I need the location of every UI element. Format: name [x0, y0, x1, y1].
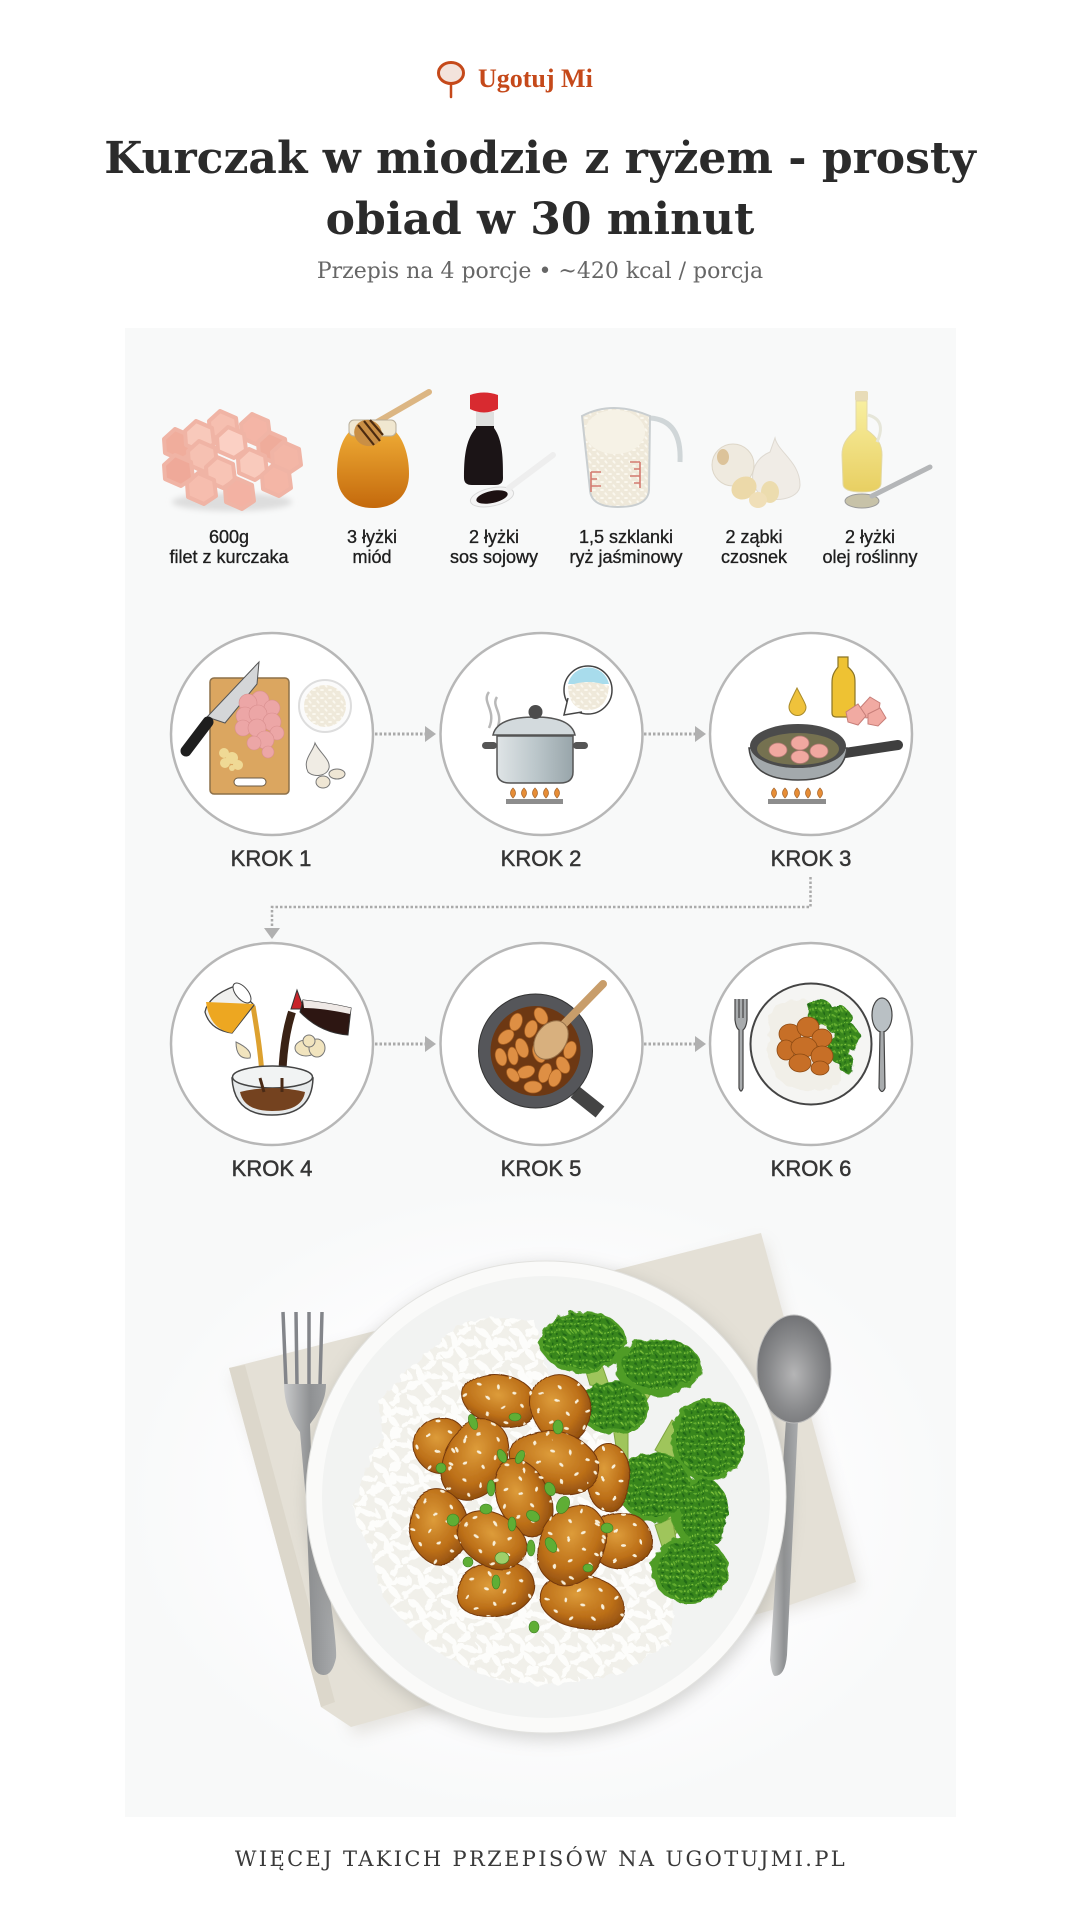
broccoli	[540, 1311, 745, 1604]
step 4: mix sauce	[171, 943, 373, 1145]
ingredient labels: olej roślinny	[822, 547, 918, 567]
arrow: step 3 to 4 connector	[264, 877, 810, 939]
arrow: step 1 to 2	[375, 726, 436, 742]
ingredient labels: 2 łyżki	[469, 527, 519, 547]
step labels row 1: KROK 2	[501, 846, 581, 871]
step 1: prepare ingredients	[171, 633, 373, 835]
ingredient: soy sauce	[464, 392, 553, 510]
arrow: step 2 to 3	[644, 726, 706, 742]
green onions	[436, 1413, 613, 1633]
step 3: fry chicken	[710, 633, 912, 835]
step 5: simmer in sauce	[440, 943, 642, 1145]
fork	[283, 1312, 336, 1675]
ingredients row	[164, 391, 930, 567]
ingredient: garlic	[712, 438, 800, 508]
ingredient labels: filet z kurczaka	[169, 547, 290, 567]
title: Kurczak w miodzie z ryżem - prosty	[104, 133, 977, 184]
plate	[306, 1261, 790, 1740]
step labels row 2: KROK 4	[232, 1156, 312, 1181]
step labels row 2: KROK 6	[771, 1156, 851, 1181]
ingredient: jasmine rice in measuring cup	[582, 408, 680, 507]
panel: recipe illustration	[125, 328, 956, 1817]
arrow: step 5 to 6	[644, 1036, 706, 1052]
napkin	[229, 1233, 860, 1735]
step labels row 1: KROK 1	[231, 846, 311, 871]
step labels row 2	[232, 1156, 851, 1181]
step labels row 1	[231, 846, 851, 871]
ingredient labels: 600g	[209, 527, 249, 547]
logo: Ugotuj Mi	[438, 62, 593, 97]
spoon	[757, 1315, 831, 1676]
ingredient labels: 1,5 szklanki	[579, 527, 673, 547]
ingredient labels: 2 łyżki	[845, 527, 895, 547]
subtitle: Przepis na 4 porcje • ~420 kcal / porcja	[317, 259, 763, 284]
step 6: serve	[710, 943, 912, 1145]
ingredient labels: 3 łyżki	[347, 527, 397, 547]
honey chicken	[403, 1364, 652, 1637]
ingredient labels: miód	[352, 547, 392, 567]
title: obiad w 30 minut	[326, 194, 755, 245]
step labels row 1: KROK 3	[771, 846, 851, 871]
step 2: cook rice	[440, 633, 642, 835]
ingredient labels: sos sojowy	[450, 547, 538, 567]
step labels row 2: KROK 5	[501, 1156, 581, 1181]
ingredient labels: 2 ząbki	[725, 527, 783, 547]
footer call to action: WIĘCEJ TAKICH PRZEPISÓW NA UGOTUJMI.PL	[235, 1846, 847, 1871]
rice	[354, 1318, 675, 1685]
ingredient: chicken	[164, 411, 301, 511]
ingredient labels: czosnek	[721, 547, 788, 567]
arrow: step 4 to 5	[375, 1036, 436, 1052]
finished dish photo	[229, 1233, 860, 1740]
ingredient labels: ryż jaśminowy	[569, 547, 683, 567]
logo: Ugotuj Mi: Ugotuj Mi	[478, 64, 593, 93]
ingredient: honey	[337, 392, 429, 508]
ingredient labels	[169, 527, 918, 567]
ingredient: vegetable oil	[842, 391, 930, 508]
